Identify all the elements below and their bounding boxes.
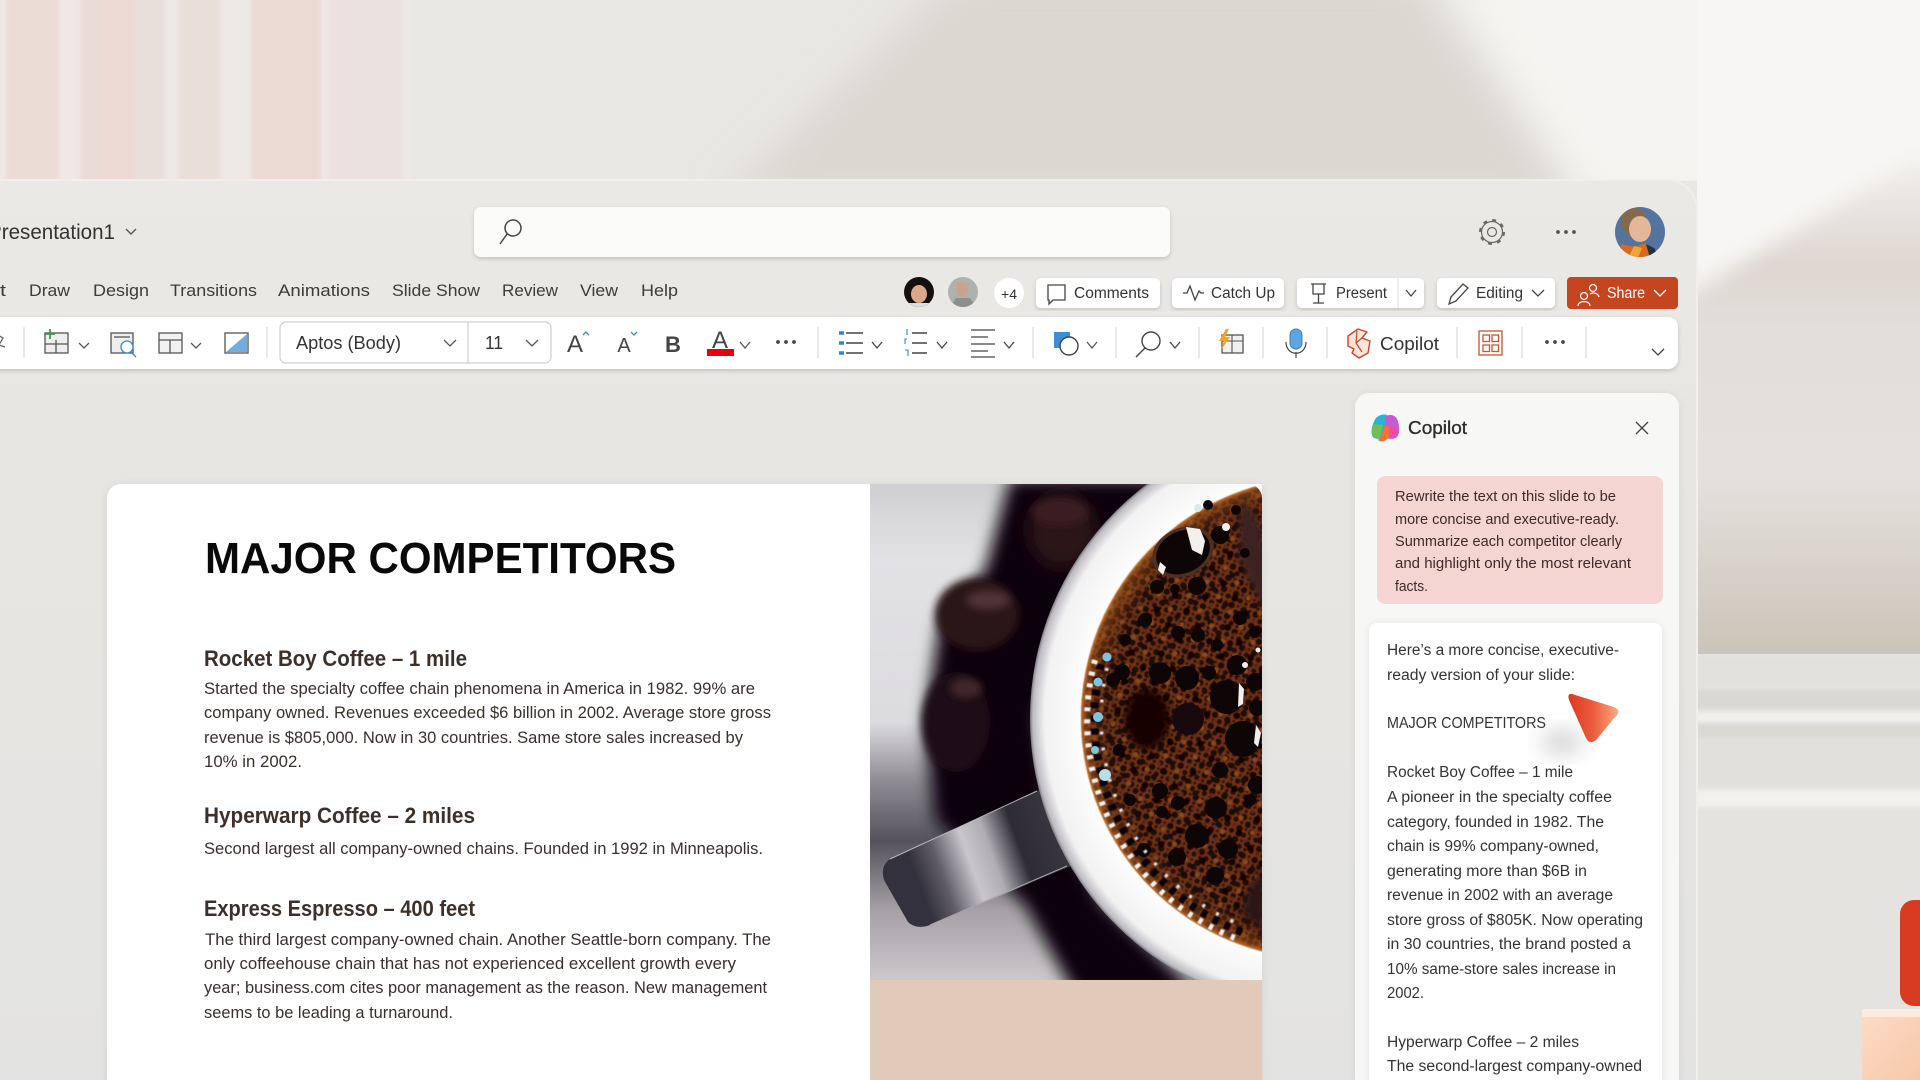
response card: chain is 99% company-owned, <box>1387 838 1599 855</box>
ribbon tabs: Help <box>641 281 678 300</box>
panel title: Copilot <box>1408 418 1467 438</box>
font formatting controls: A <box>712 327 728 354</box>
prompt bubble <box>1377 476 1663 604</box>
icon: more options <box>1556 230 1576 234</box>
application window <box>0 180 1697 1080</box>
button: Share <box>1567 277 1678 309</box>
response card: store gross of $805K. Now operating <box>1387 912 1643 929</box>
competitor: Rocket Boy Coffee: revenue is $805,000. Now in 30 countries. Same store sales increased by <box>204 728 743 747</box>
slide <box>107 484 1262 1080</box>
Copilot side panel <box>1355 393 1679 1080</box>
icon: expand ribbon <box>1652 349 1664 355</box>
ribbon tabs: t <box>0 281 6 300</box>
font family picker <box>280 322 551 363</box>
decorative 3D shapes at right edge <box>1862 900 1920 1080</box>
button: Comments <box>1036 278 1160 308</box>
response card: category, founded in 1982. The <box>1387 814 1604 831</box>
coffee surface <box>1080 486 1262 952</box>
ribbon tabs: Review <box>502 281 559 300</box>
icon: format painter fragment <box>0 335 5 347</box>
response card: The second-largest company-owned <box>1387 1058 1642 1075</box>
button: Present <box>1297 278 1424 308</box>
response card: in 30 countries, the brand posted a <box>1387 936 1631 953</box>
ribbon tabs: Design <box>93 281 149 300</box>
icon: settings gear <box>1480 220 1504 244</box>
prompt bubble: more concise and executive-ready. <box>1395 512 1619 528</box>
competitor: Express Espresso: year; business.com cites poor management as the reason. New management <box>204 978 767 997</box>
ribbon tabs: Slide Show <box>392 281 481 300</box>
ribbon tabs <box>0 281 678 300</box>
icon: close panel <box>1636 422 1648 434</box>
bubble highlights <box>1158 504 1261 747</box>
paragraph controls: bullets, numbering, alignment <box>839 329 1014 357</box>
response card: ready version of your slide: <box>1387 667 1575 684</box>
Copilot logo <box>1372 414 1399 441</box>
icon: find <box>1136 332 1180 357</box>
ribbon tabs: View <box>580 281 619 300</box>
icon: add-ins grid <box>1479 331 1502 355</box>
button: Present: Present <box>1336 285 1388 302</box>
competitor: Rocket Boy Coffee: 10% in 2002. <box>204 752 302 771</box>
collaborator avatars <box>904 277 1024 308</box>
user avatar <box>1614 207 1665 258</box>
ribbon tabs: Draw <box>29 281 71 300</box>
font formatting controls <box>567 327 796 358</box>
icon: background format <box>225 333 248 353</box>
foam edge <box>1087 660 1244 940</box>
competitor: Hyperwarp Coffee: Second largest all company-owned chains. Founded in 1992 in Minneapolis. <box>204 839 763 858</box>
response card: A pioneer in the specialty coffee <box>1387 789 1612 806</box>
button: Editing <box>1437 278 1555 308</box>
photo: coffee cup from above <box>870 484 1262 980</box>
response card: Rocket Boy Coffee – 1 mile <box>1387 764 1573 781</box>
response card: 10% same-store sales increase in <box>1387 961 1616 978</box>
button: Editing: Editing <box>1476 285 1523 302</box>
response card: 2002. <box>1387 985 1424 1002</box>
icon: new slide <box>45 329 89 353</box>
prompt bubble: facts. <box>1395 579 1428 595</box>
response card: Here’s a more concise, executive- <box>1387 642 1619 659</box>
competitor: Express Espresso: The third largest company-owned chain. Another Seattle-born company. The <box>205 930 771 949</box>
beige block below photo <box>870 980 1262 1080</box>
font family picker: Aptos (Body) <box>296 333 401 353</box>
competitor: Rocket Boy Coffee: Started the specialty coffee chain phenomena in America in 1982. 99% are <box>204 679 755 698</box>
ribbon tabs: Animations <box>278 281 370 300</box>
blurred coffee beans <box>922 478 1200 995</box>
button: Copilot in ribbon <box>1348 329 1439 358</box>
font family picker: 11 <box>485 333 503 353</box>
competitor: Express Espresso: only coffeehouse chain that has not experienced excellent growth every <box>204 954 736 973</box>
competitor: Express Espresso <box>204 896 771 1022</box>
icon: dictation microphone <box>1286 329 1306 358</box>
background: blurred room scene <box>0 0 1920 807</box>
competitor: Express Espresso: seems to be leading a turnaround. <box>204 1003 453 1022</box>
icon: shapes <box>1054 332 1097 355</box>
icon: more commands <box>1545 340 1565 344</box>
collaborator avatars: +4 <box>1001 286 1017 302</box>
prompt bubble: Rewrite the text on this slide to be <box>1395 489 1616 505</box>
competitor: Rocket Boy Coffee: company owned. Revenues exceeded $6 billion in 2002. Average store gross <box>204 703 771 722</box>
button: Copilot in ribbon: Copilot <box>1380 334 1439 354</box>
competitor: Express Espresso: Express Espresso – 400 feet <box>204 896 476 921</box>
icon: layout <box>159 333 201 353</box>
prompt bubble: Summarize each competitor clearly <box>1395 534 1623 550</box>
response card: revenue in 2002 with an average <box>1387 887 1613 904</box>
font formatting controls: B <box>665 332 681 357</box>
font formatting controls: A <box>567 331 583 358</box>
animated cursor pointer <box>1540 694 1618 756</box>
mug handle <box>882 790 1070 927</box>
response card <box>1369 623 1662 1080</box>
slide title: MAJOR COMPETITORS <box>205 534 676 583</box>
large bubbles <box>1106 500 1266 885</box>
response card: Hyperwarp Coffee – 2 miles <box>1387 1034 1579 1051</box>
button: Catch Up: Catch Up <box>1211 285 1275 302</box>
button: Catch Up <box>1172 278 1284 308</box>
competitor: Rocket Boy Coffee <box>204 646 771 771</box>
mug rim <box>1030 484 1262 980</box>
competitor: Rocket Boy Coffee: Rocket Boy Coffee – 1 mile <box>204 646 467 671</box>
competitor: Hyperwarp Coffee: Hyperwarp Coffee – 2 miles <box>204 803 475 828</box>
competitor: Hyperwarp Coffee <box>204 803 763 858</box>
ribbon toolbar <box>0 317 1678 369</box>
icon: reuse slides <box>111 333 136 357</box>
prompt bubble: and highlight only the most relevant <box>1395 556 1631 572</box>
font formatting controls: A <box>617 335 631 357</box>
response card: generating more than $6B in <box>1387 863 1587 880</box>
search box <box>474 207 1170 257</box>
response card: MAJOR COMPETITORS <box>1387 715 1546 732</box>
button: Share: Share <box>1607 285 1645 302</box>
icon: designer <box>1219 329 1243 353</box>
ribbon tabs: Transitions <box>170 281 257 300</box>
button: Comments: Comments <box>1074 285 1149 302</box>
